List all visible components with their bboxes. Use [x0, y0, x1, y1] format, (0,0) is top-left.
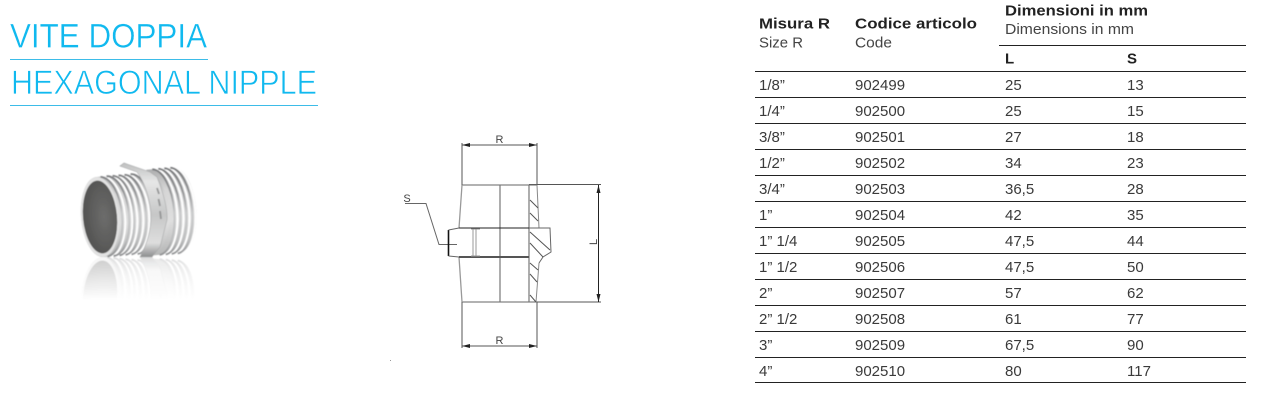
row 2: 2”	[759, 285, 772, 302]
row 1/2: 23	[1127, 155, 1144, 172]
row 2	[759, 285, 1144, 302]
table header: L	[1005, 50, 1014, 68]
row 2 1/2: 77	[1127, 311, 1144, 328]
stray print dot	[390, 360, 391, 361]
dimension L: L	[588, 239, 600, 245]
row 1: 42	[1005, 207, 1022, 224]
row 3/8	[759, 129, 1144, 146]
row 2 1/2	[759, 311, 1144, 328]
row 1/8: 25	[1005, 77, 1022, 94]
row 4: 902510	[855, 363, 905, 380]
row 1/2: 1/2”	[759, 155, 785, 172]
title: Italian product name: VITE DOPPIA	[10, 18, 207, 56]
photo: stainless steel hexagonal nipple with reflection	[70, 163, 210, 358]
row 1 1/4: 44	[1127, 233, 1144, 250]
row 3/4	[759, 181, 1144, 198]
row 1/4: 902500	[855, 103, 905, 120]
row 3/8: 902501	[855, 129, 905, 146]
row 1 1/2	[759, 259, 1144, 276]
row 1/8	[759, 77, 1144, 94]
leader S	[403, 193, 457, 244]
subtitle underline	[10, 105, 318, 106]
row 1 1/2: 1” 1/2	[759, 259, 797, 276]
nipple body	[78, 163, 196, 259]
row 3: 67,5	[1005, 337, 1034, 354]
row 2 1/2: 61	[1005, 311, 1022, 328]
row 4: 4”	[759, 363, 772, 380]
row 1/8: 902499	[855, 77, 905, 94]
table header: Dimensioni in mm	[1005, 4, 1148, 20]
nipple body outline	[448, 185, 551, 302]
photo reflection	[70, 253, 210, 358]
row 3/8: 27	[1005, 129, 1022, 146]
row 1/8: 13	[1127, 77, 1144, 94]
row 1/2: 902502	[855, 155, 905, 172]
row 3/4: 3/4”	[759, 181, 785, 198]
row 1/8: 1/8”	[759, 77, 785, 94]
dimension R bottom	[462, 302, 537, 348]
table: dimensions by size	[755, 4, 1246, 383]
table header: Dimensions in mm	[1005, 21, 1134, 38]
row 4: 80	[1005, 363, 1022, 380]
title underline	[10, 59, 208, 60]
row 3/8: 18	[1127, 129, 1144, 146]
row 2 1/2: 902508	[855, 311, 905, 328]
table header: S	[1127, 50, 1137, 68]
dimension L	[529, 184, 601, 302]
row 1 1/4: 1” 1/4	[759, 233, 797, 250]
row 3/4: 28	[1127, 181, 1144, 198]
row 1: 1”	[759, 207, 772, 224]
row 1 1/4: 902505	[855, 233, 905, 250]
row 1/4: 25	[1005, 103, 1022, 120]
subtitle: English product name: HEXAGONAL NIPPLE	[11, 64, 317, 102]
row 1: 35	[1127, 207, 1144, 224]
row 1/4: 1/4”	[759, 103, 785, 120]
row 1/4: 15	[1127, 103, 1144, 120]
row 3: 90	[1127, 337, 1144, 354]
row 4	[759, 363, 1151, 380]
row 1 1/2: 47,5	[1005, 259, 1034, 276]
row 1 1/2: 902506	[855, 259, 905, 276]
leader S: S	[403, 193, 411, 205]
row 2 1/2: 2” 1/2	[759, 311, 797, 328]
row 3: 3”	[759, 337, 772, 354]
row 2: 57	[1005, 285, 1022, 302]
table header: Size R	[759, 34, 803, 52]
row 3/8: 3/8”	[759, 129, 785, 146]
row 1 1/4: 47,5	[1005, 233, 1034, 250]
row 2: 902507	[855, 285, 905, 302]
row 2: 62	[1127, 285, 1144, 302]
table rules	[755, 45, 1246, 383]
row 1 1/4	[759, 233, 1144, 250]
row 3: 902509	[855, 337, 905, 354]
dimension R top	[462, 134, 537, 185]
row 3/4: 36,5	[1005, 181, 1034, 198]
row 1/4	[759, 103, 1144, 120]
table header: Codice articolo	[855, 16, 977, 32]
table header	[759, 4, 1148, 68]
row 1: 902504	[855, 207, 905, 224]
dimension R bottom: R	[496, 335, 504, 347]
row 3/4: 902503	[855, 181, 905, 198]
dimension R top: R	[496, 134, 504, 146]
table header: Misura R	[759, 16, 831, 32]
technical drawing: cross-section with dimensions	[403, 134, 601, 348]
row 1/2	[759, 155, 1144, 172]
row 4: 117	[1127, 363, 1151, 380]
row 3	[759, 337, 1144, 354]
row 1 1/2: 50	[1127, 259, 1144, 276]
table header: Code	[855, 34, 892, 52]
row 1/2: 34	[1005, 155, 1022, 172]
row 1	[759, 207, 1144, 224]
